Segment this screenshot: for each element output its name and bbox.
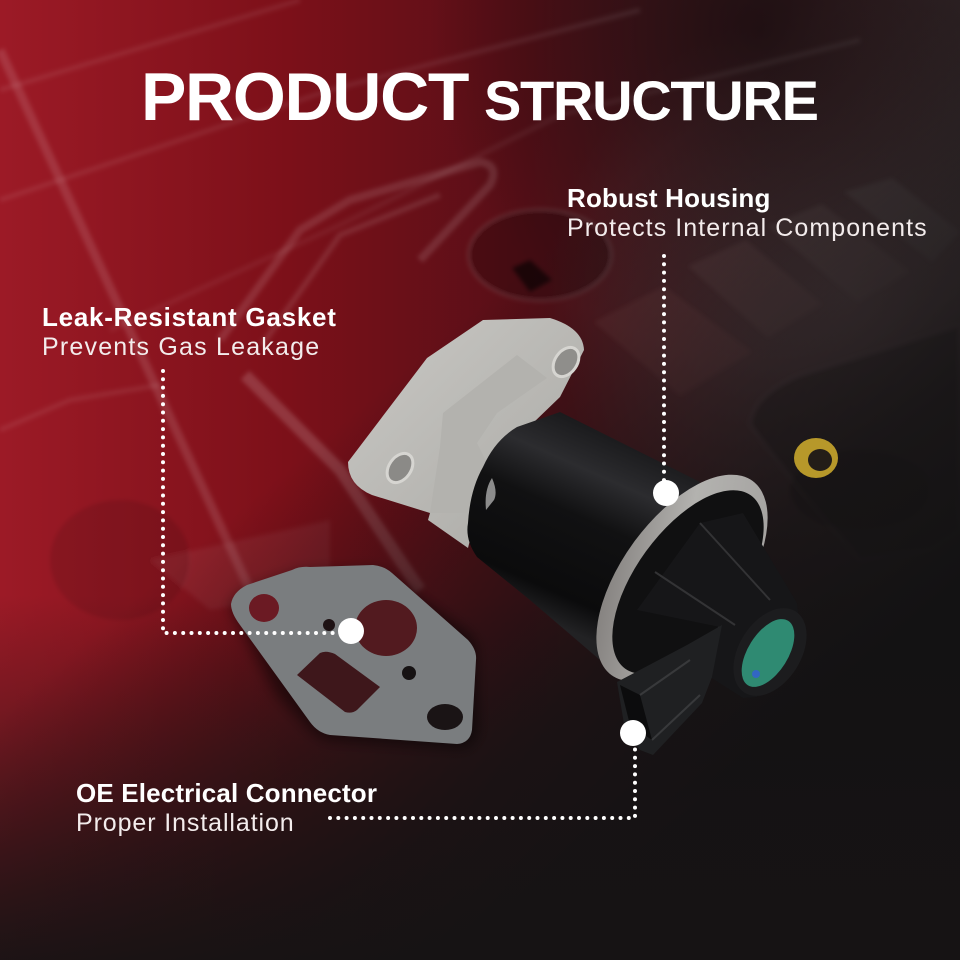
callout: OE electrical connector: OE Electrical Connector: [76, 778, 377, 808]
callout: leak-resistant gasket: [42, 302, 337, 361]
leader: connector: [330, 720, 646, 818]
rear cover: [583, 465, 793, 699]
callout: robust housing: [567, 183, 928, 242]
callout: robust housing: Robust Housing: [567, 183, 771, 213]
callout: leak-resistant gasket: Leak-Resistant Gasket: [42, 302, 337, 332]
callout: OE electrical connector: Proper Installation: [76, 809, 295, 837]
leader: housing: [653, 256, 679, 506]
metal ring: [563, 446, 801, 710]
title: STRUCTURE: [484, 68, 818, 132]
green label: [718, 595, 822, 709]
leader: gasket: [163, 371, 364, 644]
oil cap accent: [794, 438, 838, 478]
callout: OE electrical connector: [76, 778, 377, 837]
gasket: [231, 565, 478, 748]
callout: leak-resistant gasket: Prevents Gas Leakage: [42, 333, 320, 361]
callout: robust housing: Protects Internal Components: [567, 214, 928, 242]
electrical connector: [617, 625, 722, 755]
black actuator housing: [467, 412, 700, 660]
title: PRODUCT: [141, 58, 468, 134]
title: [141, 58, 818, 134]
mounting flange: [348, 318, 584, 548]
